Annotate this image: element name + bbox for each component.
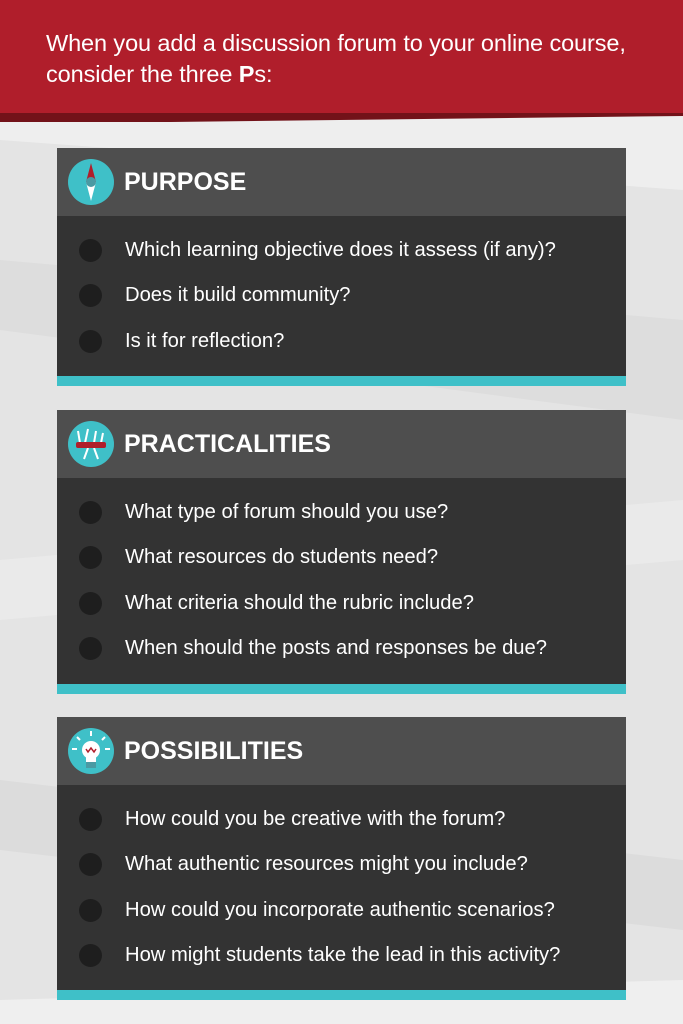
heading: purpose: PURPOSE <box>124 168 246 196</box>
heading: purpose <box>57 148 626 216</box>
panel: possibilities: How could you be creative with the forum? <box>125 808 505 830</box>
panel: practicalities: What criteria should the rubric include? <box>125 592 474 614</box>
intro text <box>46 30 626 87</box>
panel: practicalities: What type of forum should you use? <box>125 501 448 523</box>
panel: possibilities: What authentic resources might you include? <box>125 853 528 875</box>
intro text: consider the three Ps: <box>46 61 272 87</box>
panel: possibilities: How could you incorporate authentic scenarios? <box>125 899 555 921</box>
panel: possibilities <box>57 717 626 1000</box>
heading: practicalities: PRACTICALITIES <box>124 430 331 458</box>
intro text: When you add a discussion forum to your online course, <box>46 30 626 56</box>
panel: purpose <box>57 148 626 386</box>
panel: purpose: Does it build community? <box>125 284 351 306</box>
panel: purpose: Is it for reflection? <box>125 330 284 352</box>
panel: practicalities: What resources do students need? <box>125 546 438 568</box>
panel: purpose: Which learning objective does it assess (if any)? <box>125 239 556 261</box>
heading: practicalities <box>57 410 626 478</box>
panel: practicalities: When should the posts and responses be due? <box>125 637 547 659</box>
panel: possibilities: How might students take the lead in this activity? <box>125 944 560 966</box>
heading: possibilities: POSSIBILITIES <box>124 737 303 765</box>
panel: practicalities <box>57 410 626 694</box>
header banner <box>0 0 683 122</box>
heading: possibilities <box>57 717 626 785</box>
